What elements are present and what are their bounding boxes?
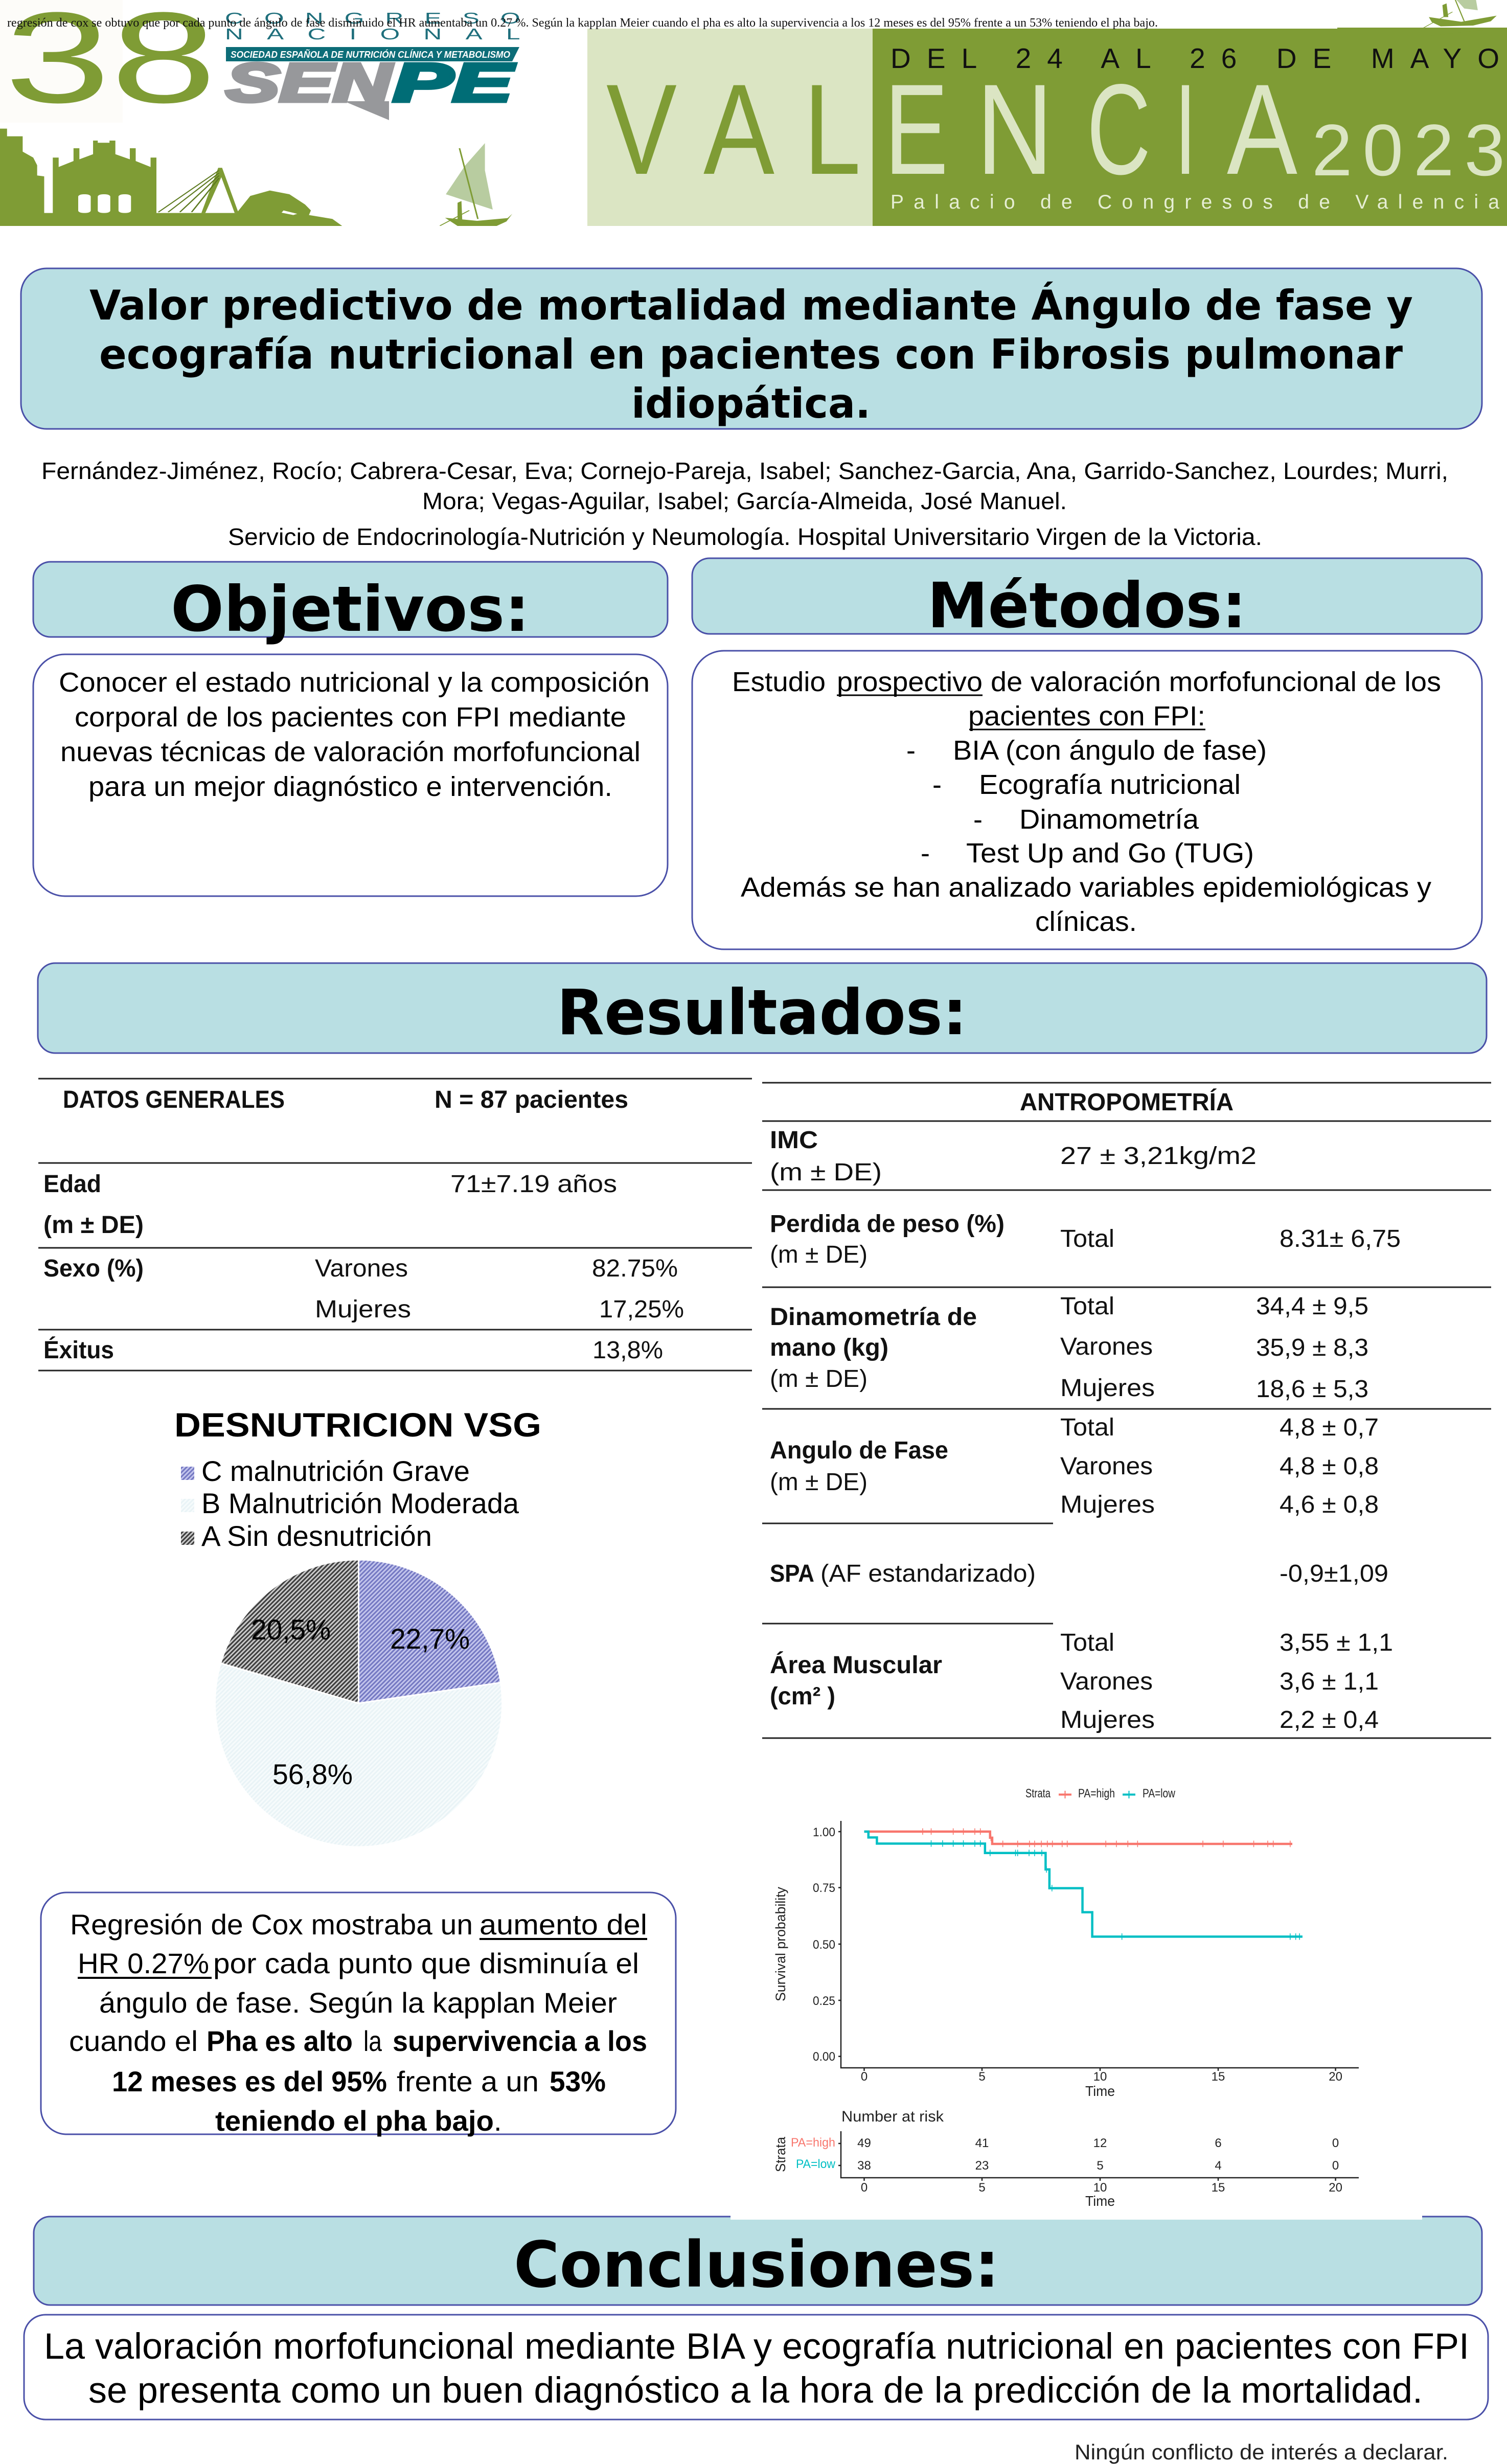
table: antropometria: mano (kg) <box>770 1334 888 1361</box>
callout: regresion de Cox: ángulo de fase. Según la kapplan Meier <box>99 1987 617 2019</box>
risk table numbers: 10 <box>1093 2181 1107 2195</box>
x tick labels <box>861 2070 1342 2084</box>
chart legend: PA=low <box>1143 1787 1176 1800</box>
panel: objetivos text <box>33 654 668 896</box>
panel: conclusiones heading: Conclusiones: <box>514 2228 999 2302</box>
overflow abstract line: regresión de cox se obtuvo que por cada punto de ángulo de fase disminuido el HR aumentaba un 0.27 %. Según la kapplan Meier cuando el pha es alto la supervivencia a los 12 meses es del 95% frente a un 53% teniendo el pha bajo. <box>7 16 1158 30</box>
risk table axes <box>838 2131 1359 2181</box>
y axis title: Survival probability <box>773 1887 788 2001</box>
x tick labels: 15 <box>1212 2070 1225 2084</box>
table: antropometria: 4,6 ± 0,8 <box>1280 1491 1379 1518</box>
panel: date and venue: A <box>1227 58 1297 201</box>
table: antropometria: Área Muscular <box>770 1651 942 1679</box>
table: antropometria: IMC <box>770 1127 818 1154</box>
icon: sailboat top right <box>1421 0 1497 37</box>
chart: Kaplan-Meier survival curve <box>773 1787 1359 2209</box>
table: antropometria: Varones <box>1060 1453 1153 1480</box>
table: datos generales: Sexo (%) <box>43 1255 144 1282</box>
callout: regresion de Cox: 53% <box>550 2065 606 2097</box>
risk table numbers: 0 <box>1332 2159 1339 2173</box>
risk table strata labels: PA=low <box>796 2157 836 2171</box>
risk table numbers <box>857 2136 1342 2195</box>
panel: metodos text: clínicas. <box>1035 906 1137 937</box>
table: antropometria: ANTROPOMETRÍA <box>1020 1088 1234 1116</box>
callout: regresion de Cox: frente a un <box>397 2065 539 2097</box>
congress name <box>225 9 520 43</box>
header banner <box>0 0 1507 226</box>
risk table numbers: 4 <box>1215 2159 1222 2173</box>
panel: date and venue: C <box>1087 58 1151 201</box>
table: datos generales: N = 87 pacientes <box>435 1086 628 1113</box>
table: antropometria: Mujeres <box>1060 1706 1155 1733</box>
panel: date and venue: Palacio de Congresos de Valencia <box>890 191 1499 213</box>
authors: Fernández-Jiménez, Rocío; Cabrera-Cesar, Eva; Cornejo-Pareja, Isabel; Sanchez-Garcia, Ana, Garrido-Sanchez, Lourdes; Murri, <box>41 458 1448 484</box>
table: datos generales: DATOS GENERALES <box>63 1086 285 1113</box>
society band: SOCIEDAD ESPAÑOLA DE NUTRICIÓN CLÍNICA Y METABOLISMO <box>231 49 510 60</box>
congress name: NACIONAL <box>225 25 520 43</box>
table: antropometria: 4,8 ± 0,8 <box>1280 1453 1379 1480</box>
risk table strata labels <box>773 2136 836 2172</box>
pie labels: 22,7% <box>390 1623 470 1655</box>
chart legend: Strata <box>1025 1787 1051 1800</box>
table: antropometria: 27 ± 3,21kg/m2 <box>1060 1143 1257 1170</box>
SENPE logo <box>226 53 515 120</box>
table: datos generales: 17,25% <box>599 1296 684 1323</box>
pie labels: 56,8% <box>272 1758 353 1790</box>
legend: C malnutrición Grave <box>201 1455 470 1487</box>
panel: metodos heading <box>692 558 1482 642</box>
callout: regresion de Cox: Regresión de Cox mostraba un <box>70 1908 473 1941</box>
table: antropometria: 2,2 ± 0,4 <box>1280 1706 1379 1733</box>
callout: regresion de Cox: HR 0.27% <box>78 1947 209 1979</box>
panel: metodos text: de valoración morfofuncional de los <box>991 667 1441 697</box>
table: antropometria: SPA <box>770 1560 814 1587</box>
callout: regresion de Cox <box>41 1892 676 2137</box>
panel: metodos text: Ecografía nutricional <box>979 769 1241 800</box>
legend <box>181 1455 519 1552</box>
x tick labels: 5 <box>978 2070 986 2084</box>
table: datos generales: Edad <box>43 1171 101 1198</box>
table: antropometria: Total <box>1060 1629 1114 1656</box>
table: datos generales: Mujeres <box>315 1296 411 1323</box>
table: antropometria: Total <box>1060 1225 1114 1252</box>
panel: metodos text: BIA (con ángulo de fase) <box>953 735 1267 766</box>
y tick labels <box>813 1826 835 2064</box>
y tick labels: 0.00 <box>813 2050 835 2064</box>
callout: regresion de Cox: la <box>363 2025 382 2057</box>
x tick labels: 20 <box>1329 2070 1342 2084</box>
table: antropometria: 34,4 ± 9,5 <box>1256 1293 1368 1320</box>
x axis title: Time <box>1085 2083 1115 2099</box>
panel: metodos text: Estudio <box>732 667 826 697</box>
table: datos generales: Varones <box>315 1255 408 1282</box>
risk table numbers: 23 <box>975 2159 989 2173</box>
pie slices <box>215 1560 503 1847</box>
y tick labels: 0.25 <box>813 1994 835 2008</box>
panel: metodos text: pacientes con FPI: <box>968 701 1205 732</box>
callout: regresion de Cox: por cada punto que disminuía el <box>213 1947 639 1979</box>
table: antropometria: Mujeres <box>1060 1375 1155 1402</box>
panel: metodos text: - <box>906 735 916 766</box>
table: antropometria <box>762 1083 1491 1738</box>
panel: conclusiones text <box>24 2315 1488 2420</box>
title <box>21 268 1482 429</box>
authors: Servicio de Endocrinología-Nutrición y Neumología. Hospital Universitario Virgen de la Victoria. <box>228 523 1262 550</box>
panel: metodos text: - <box>932 769 942 800</box>
legend: B Malnutrición Moderada <box>201 1487 519 1519</box>
panel: date and venue: N <box>976 58 1053 201</box>
chart: desnutricion VSG pie <box>174 1406 541 1847</box>
panel: objetivos text: nuevas técnicas de valoración morfofuncional <box>60 737 641 767</box>
table: antropometria: Angulo de Fase <box>770 1437 948 1464</box>
congress name: CONGRESO <box>225 9 520 27</box>
survival curve PA=low <box>864 1832 1303 1940</box>
table: antropometria: 18,6 ± 5,3 <box>1256 1376 1368 1403</box>
SENPE logo: SEN <box>226 53 393 113</box>
risk table numbers: 49 <box>857 2136 871 2150</box>
risk table numbers: 0 <box>861 2181 867 2195</box>
table: antropometria: (m ± DE) <box>770 1365 867 1393</box>
table: antropometria: 8.31± 6,75 <box>1280 1225 1401 1252</box>
callout: regresion de Cox: cuando el <box>69 2025 198 2057</box>
table: antropometria: Varones <box>1060 1333 1153 1360</box>
table: antropometria: -0,9±1,09 <box>1280 1560 1388 1587</box>
panel: objetivos text: corporal de los pacientes con FPI mediante <box>75 702 626 733</box>
table: antropometria: 4,8 ± 0,7 <box>1280 1414 1379 1441</box>
panel: conclusiones text: La valoración morfofuncional mediante BIA y ecografía nutricional en pacientes con FPI <box>44 2326 1469 2367</box>
table: datos generales: 13,8% <box>592 1337 663 1364</box>
risk table numbers: 5 <box>1097 2159 1104 2173</box>
panel: date and venue: V <box>606 58 677 201</box>
title: idiopática. <box>631 380 871 427</box>
table: antropometria: Perdida de peso (%) <box>770 1211 1004 1238</box>
table: antropometria: (m ± DE) <box>770 1241 867 1268</box>
table: antropometria: Total <box>1060 1414 1114 1441</box>
chart legend <box>1025 1787 1176 1800</box>
panel: resultados heading: Resultados: <box>557 976 967 1049</box>
panel: objetivos text: para un mejor diagnóstico e intervención. <box>88 771 612 802</box>
y tick labels: 0.50 <box>813 1938 835 1952</box>
risk table numbers: 41 <box>975 2136 989 2150</box>
table: datos generales: 82.75% <box>592 1255 678 1282</box>
panel: conclusiones heading <box>34 2214 1482 2305</box>
title: ecografía nutricional en pacientes con Fibrosis pulmonar <box>99 331 1403 378</box>
panel: date and venue: 2023 <box>1312 110 1505 191</box>
authors: Mora; Vegas-Aguilar, Isabel; García-Almeida, José Manuel. <box>422 488 1067 514</box>
panel: metodos text: Dinamometría <box>1019 804 1199 835</box>
callout: regresion de Cox: supervivencia a los <box>393 2025 647 2057</box>
panel: date and venue: L <box>804 58 861 201</box>
title: Valor predictivo de mortalidad mediante Ángulo de fase y <box>89 281 1413 329</box>
panel: conclusiones text: se presenta como un buen diagnóstico a la hora de la predicción de la mortalidad. <box>88 2370 1423 2411</box>
survival curve PA=high <box>864 1829 1292 1847</box>
pie labels <box>251 1613 470 1790</box>
risk table strata labels: Strata <box>773 2136 788 2172</box>
faint building background <box>0 0 123 123</box>
icon: Valencia skyline <box>0 129 342 226</box>
legend: A Sin desnutrición <box>201 1520 432 1552</box>
panel: metodos text: - <box>921 838 930 869</box>
table: antropometria: Mujeres <box>1060 1491 1155 1518</box>
callout: regresion de Cox: aumento del <box>480 1908 647 1941</box>
panel: objetivos heading <box>33 562 668 646</box>
panel: metodos text: Test Up and Go (TUG) <box>966 838 1254 869</box>
risk table heading: Number at risk <box>841 2108 944 2125</box>
table: antropometria: (m ± DE) <box>770 1469 867 1496</box>
pie labels: 20,5% <box>251 1613 331 1646</box>
panel: metodos text <box>692 651 1482 949</box>
footer: conflict of interest note: Ningún conflicto de interés a declarar. <box>1075 2440 1448 2464</box>
callout: regresion de Cox: . <box>494 2105 502 2137</box>
icon: sailboat <box>440 143 512 226</box>
risk table numbers: 6 <box>1215 2136 1222 2150</box>
risk table numbers: 38 <box>857 2159 871 2173</box>
risk table numbers: 5 <box>978 2181 986 2195</box>
authors <box>41 458 1448 550</box>
panel: metodos text: - <box>973 804 983 835</box>
plot axes <box>838 1821 1359 2071</box>
callout: regresion de Cox: teniendo el pha bajo <box>215 2105 494 2137</box>
panel: date and venue: I <box>1175 58 1196 201</box>
table: datos generales: Éxitus <box>43 1336 114 1364</box>
callout: regresion de Cox: Pha es alto <box>207 2025 353 2057</box>
panel: resultados heading <box>38 963 1487 1053</box>
panel: date and venue: E <box>884 58 948 201</box>
panel: date and venue: A <box>703 58 774 201</box>
risk table numbers: 20 <box>1329 2181 1342 2195</box>
table: antropometria: 3,55 ± 1,1 <box>1280 1629 1393 1656</box>
chart legend: PA=high <box>1078 1787 1115 1800</box>
panel: metodos text: Además se han analizado variables epidemiológicas y <box>741 872 1431 903</box>
x tick labels: 0 <box>861 2070 867 2084</box>
panel: metodos heading: Métodos: <box>927 569 1246 642</box>
y tick labels: 0.75 <box>813 1881 835 1895</box>
risk table numbers: 0 <box>1332 2136 1339 2150</box>
SENPE logo: PE <box>393 53 515 113</box>
panel: date and venue: DEL 24 AL 26 DE MAYO <box>890 42 1499 74</box>
table: antropometria: Total <box>1060 1293 1114 1320</box>
panel: objetivos heading: Objetivos: <box>171 573 530 646</box>
callout: regresion de Cox: 12 meses es del 95% <box>112 2065 387 2097</box>
table: antropometria: Dinamometría de <box>770 1304 977 1331</box>
table: antropometria: Varones <box>1060 1668 1153 1695</box>
risk table strata labels: PA=high <box>791 2136 835 2150</box>
table: datos generales <box>38 1079 752 1371</box>
risk table numbers: 12 <box>1093 2136 1107 2150</box>
panel: objetivos text: Conocer el estado nutricional y la composición <box>59 667 650 698</box>
table: antropometria: (cm² ) <box>770 1683 835 1710</box>
risk table numbers: 15 <box>1212 2181 1225 2195</box>
table: antropometria: (AF estandarizado) <box>820 1560 1036 1587</box>
panel: metodos text: prospectivo <box>837 667 983 697</box>
risk table x axis title: Time <box>1085 2193 1115 2209</box>
panel: date and venue <box>587 28 1507 226</box>
y tick labels: 1.00 <box>813 1826 835 1839</box>
table: datos generales: 71±7.19 años <box>450 1171 617 1198</box>
table: datos generales: (m ± DE) <box>43 1212 144 1239</box>
x tick labels: 10 <box>1093 2070 1107 2084</box>
table: antropometria: 35,9 ± 8,3 <box>1256 1334 1368 1361</box>
table: antropometria: 3,6 ± 1,1 <box>1280 1668 1379 1695</box>
table: antropometria: (m ± DE) <box>770 1159 882 1186</box>
chart title: DESNUTRICION VSG <box>174 1406 541 1444</box>
